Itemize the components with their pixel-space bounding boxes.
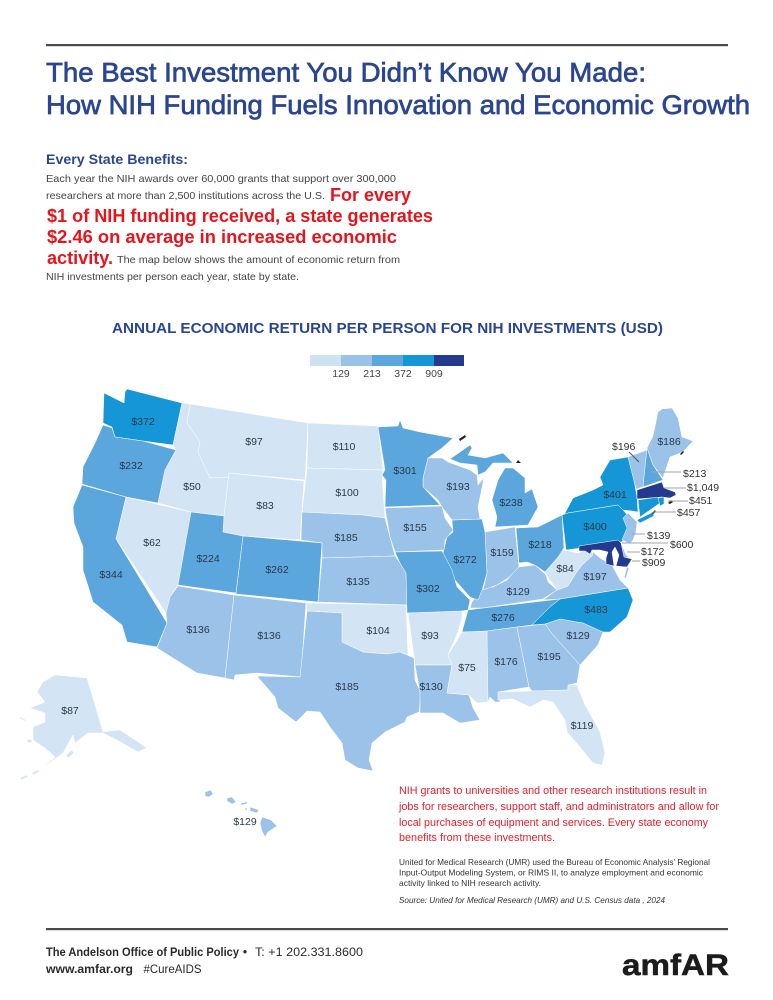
methodology note: activity linked to NIH research activity. bbox=[399, 878, 541, 888]
state: Georgia bbox=[517, 624, 580, 691]
state: Hawaii bbox=[205, 790, 277, 837]
state value labels: $104 bbox=[366, 625, 390, 637]
state: Idaho bbox=[158, 403, 229, 516]
footer contact bbox=[45, 947, 363, 976]
state: Virginia eastern shore bbox=[624, 567, 629, 578]
state: Michigan lower bbox=[492, 468, 538, 527]
legend: 213 bbox=[363, 368, 381, 380]
state: Massachusetts bbox=[637, 482, 676, 499]
state value labels: $276 bbox=[491, 612, 515, 624]
state: South Carolina bbox=[545, 619, 603, 665]
state: Louisiana bbox=[415, 665, 480, 723]
state value labels: $97 bbox=[245, 436, 263, 448]
methodology note: Input-Output Modeling System, or RIMS II, to analyze employment and economic bbox=[399, 868, 703, 878]
state: Maryland bbox=[579, 540, 632, 567]
state value labels: $301 bbox=[393, 465, 417, 477]
body text bbox=[46, 173, 400, 283]
state value labels: $197 bbox=[583, 571, 607, 583]
state: Virginia bbox=[543, 552, 628, 600]
state: Indiana bbox=[483, 527, 519, 590]
legend bbox=[310, 355, 464, 380]
state: Oklahoma bbox=[306, 603, 408, 655]
state value labels: $93 bbox=[421, 630, 439, 642]
state: Washington bbox=[103, 389, 182, 445]
northeast leader lines and labels: $600 bbox=[670, 539, 694, 551]
state: Michigan upper bbox=[450, 445, 513, 475]
state: Vermont bbox=[628, 450, 647, 489]
state: Alaska bbox=[30, 675, 147, 770]
state value labels: $218 bbox=[528, 539, 552, 551]
state value labels: $232 bbox=[119, 460, 143, 472]
footer contact: The Andelson Office of Public Policy bbox=[46, 947, 240, 959]
state value labels: $129 bbox=[506, 586, 530, 598]
state value labels: $224 bbox=[196, 553, 220, 565]
red note: benefits from these investments. bbox=[399, 832, 555, 844]
state value labels: $401 bbox=[603, 489, 627, 501]
state: Connecticut bbox=[638, 497, 660, 517]
state: California bbox=[73, 485, 167, 647]
state value labels: $84 bbox=[556, 563, 574, 575]
state: Arkansas bbox=[408, 611, 462, 665]
state: Illinois bbox=[442, 519, 487, 600]
red callout text: activity. bbox=[47, 247, 113, 268]
red callout text bbox=[47, 184, 433, 268]
amfAR logo: amfAR bbox=[622, 949, 729, 982]
title: How NIH Funding Fuels Innovation and Economic Growth bbox=[46, 90, 750, 120]
state: South Dakota bbox=[302, 468, 385, 518]
state value labels: $50 bbox=[183, 481, 201, 493]
state: Tennessee bbox=[462, 599, 560, 632]
state value labels: $119 bbox=[571, 720, 593, 732]
state: Missouri bbox=[395, 551, 470, 613]
footer contact: www.amfar.org bbox=[45, 964, 133, 976]
state value labels: $75 bbox=[458, 662, 476, 674]
state: Iowa bbox=[385, 506, 453, 552]
footer contact: T: +1 202.331.8600 bbox=[255, 947, 363, 959]
red callout text: For every bbox=[330, 184, 412, 205]
state: Maine bbox=[647, 408, 693, 478]
state value labels: $135 bbox=[346, 576, 370, 588]
state: Kentucky bbox=[470, 565, 557, 608]
state value labels: $185 bbox=[335, 681, 359, 693]
small black marks on lake islands bbox=[459, 435, 684, 514]
state: Alabama bbox=[487, 627, 529, 702]
state value labels: $136 bbox=[186, 624, 210, 636]
state: Utah bbox=[178, 512, 243, 593]
state: New Jersey bbox=[622, 513, 637, 544]
state value labels: $400 bbox=[583, 521, 607, 533]
state: Ohio bbox=[516, 515, 564, 572]
body text: NIH investments per person each year, state by state. bbox=[46, 271, 299, 283]
red note: NIH grants to universities and other research institutions result in bbox=[399, 785, 707, 797]
state: Pennsylvania bbox=[562, 505, 632, 550]
state: Texas bbox=[257, 611, 421, 771]
intro text block bbox=[46, 152, 433, 283]
state: Arizona bbox=[157, 586, 234, 678]
subheading: Every State Benefits: bbox=[46, 152, 188, 167]
state value labels: $193 bbox=[446, 481, 470, 493]
state value labels: $155 bbox=[403, 522, 427, 534]
title bbox=[46, 58, 750, 120]
northeast leader lines and labels: $172 bbox=[641, 546, 665, 558]
state: New Mexico bbox=[225, 595, 306, 680]
northeast leader lines and labels: $451 bbox=[689, 495, 713, 507]
state value labels: $130 bbox=[419, 681, 443, 693]
state: Rhode Island bbox=[658, 497, 664, 506]
state value labels: $195 bbox=[537, 651, 561, 663]
state value labels: $129 bbox=[233, 816, 257, 828]
northeast leader lines and labels: $213 bbox=[683, 468, 707, 480]
northeast leader lines and labels: $909 bbox=[642, 557, 666, 569]
state value labels: $344 bbox=[99, 569, 123, 581]
state: Nevada bbox=[116, 497, 191, 613]
state: North Dakota bbox=[307, 423, 383, 470]
methodology note: United for Medical Research (UMR) used the Bureau of Economic Analysis’ Regional bbox=[399, 857, 710, 867]
northeast leader lines and labels: $457 bbox=[677, 507, 701, 519]
northeast leader lines and labels: $196 bbox=[612, 441, 636, 453]
state: Minnesota bbox=[378, 420, 453, 507]
red callout text: $2.46 on average in increased economic bbox=[47, 226, 397, 247]
state: Colorado bbox=[236, 536, 322, 602]
state value labels: $185 bbox=[334, 532, 358, 544]
state value labels bbox=[61, 416, 681, 828]
legend: 129 bbox=[332, 368, 350, 380]
state: Kansas bbox=[318, 556, 407, 605]
red callout text: $1 of NIH funding received, a state generates bbox=[47, 205, 433, 226]
state: Florida bbox=[498, 685, 605, 765]
state: New Hampshire bbox=[643, 448, 663, 487]
state value labels: $483 bbox=[584, 604, 608, 616]
state: Wyoming bbox=[223, 473, 304, 540]
state: West Virginia bbox=[545, 547, 593, 590]
footer contact: • bbox=[243, 947, 247, 959]
state value labels: $110 bbox=[333, 441, 355, 453]
state value labels: $159 bbox=[490, 547, 514, 559]
state value labels: $87 bbox=[61, 705, 79, 717]
state: Nebraska bbox=[301, 512, 395, 558]
state value labels: $100 bbox=[335, 487, 359, 499]
state value labels: $176 bbox=[494, 656, 518, 668]
red note: jobs for researchers, support staff, and administrators and allow for bbox=[398, 801, 719, 813]
state value labels: $186 bbox=[657, 436, 681, 448]
state value labels: $136 bbox=[257, 630, 281, 642]
state value labels: $262 bbox=[265, 564, 289, 576]
source: Source: United for Medical Research (UMR) and U.S. Census data , 2024 bbox=[399, 895, 665, 905]
northeast leader lines and labels: $1,049 bbox=[687, 482, 719, 494]
state value labels: $83 bbox=[256, 500, 274, 512]
state: Long Island bbox=[637, 512, 654, 523]
state: Wisconsin bbox=[423, 458, 484, 520]
state value labels: $238 bbox=[499, 497, 523, 509]
Alaska islands bbox=[19, 717, 74, 780]
state value labels: $129 bbox=[566, 630, 590, 642]
red note: local purchases of equipment and services. Every state economy bbox=[399, 817, 708, 829]
map of states bbox=[19, 389, 693, 837]
footer contact: #CureAIDS bbox=[144, 964, 202, 976]
red note bbox=[398, 785, 719, 844]
state value labels: $62 bbox=[143, 537, 161, 549]
state value labels: $302 bbox=[416, 583, 440, 595]
state value labels: $372 bbox=[131, 416, 155, 428]
state: Oregon bbox=[82, 425, 176, 503]
state: Delaware bbox=[621, 543, 629, 558]
methodology note bbox=[399, 857, 710, 888]
legend: 909 bbox=[425, 368, 443, 380]
body text: Each year the NIH awards over 60,000 grants that support over 300,000 bbox=[46, 173, 396, 185]
title: The Best Investment You Didn’t Know You Made: bbox=[46, 58, 646, 88]
map heading: ANNUAL ECONOMIC RETURN PER PERSON FOR NIH INVESTMENTS (USD) bbox=[112, 321, 663, 337]
state value labels: $272 bbox=[453, 554, 477, 566]
state: North Carolina bbox=[532, 588, 633, 632]
northeast leader lines and labels: $139 bbox=[647, 530, 671, 542]
legend: 372 bbox=[394, 368, 412, 380]
state: Mississippi bbox=[447, 631, 488, 703]
body text: The map below shows the amount of economic return from bbox=[117, 254, 400, 266]
northeast leader lines and labels bbox=[612, 441, 719, 569]
state: New York bbox=[564, 457, 638, 515]
body text: researchers at more than 2,500 institutions across the U.S. bbox=[46, 190, 325, 202]
state: Montana bbox=[187, 404, 308, 480]
